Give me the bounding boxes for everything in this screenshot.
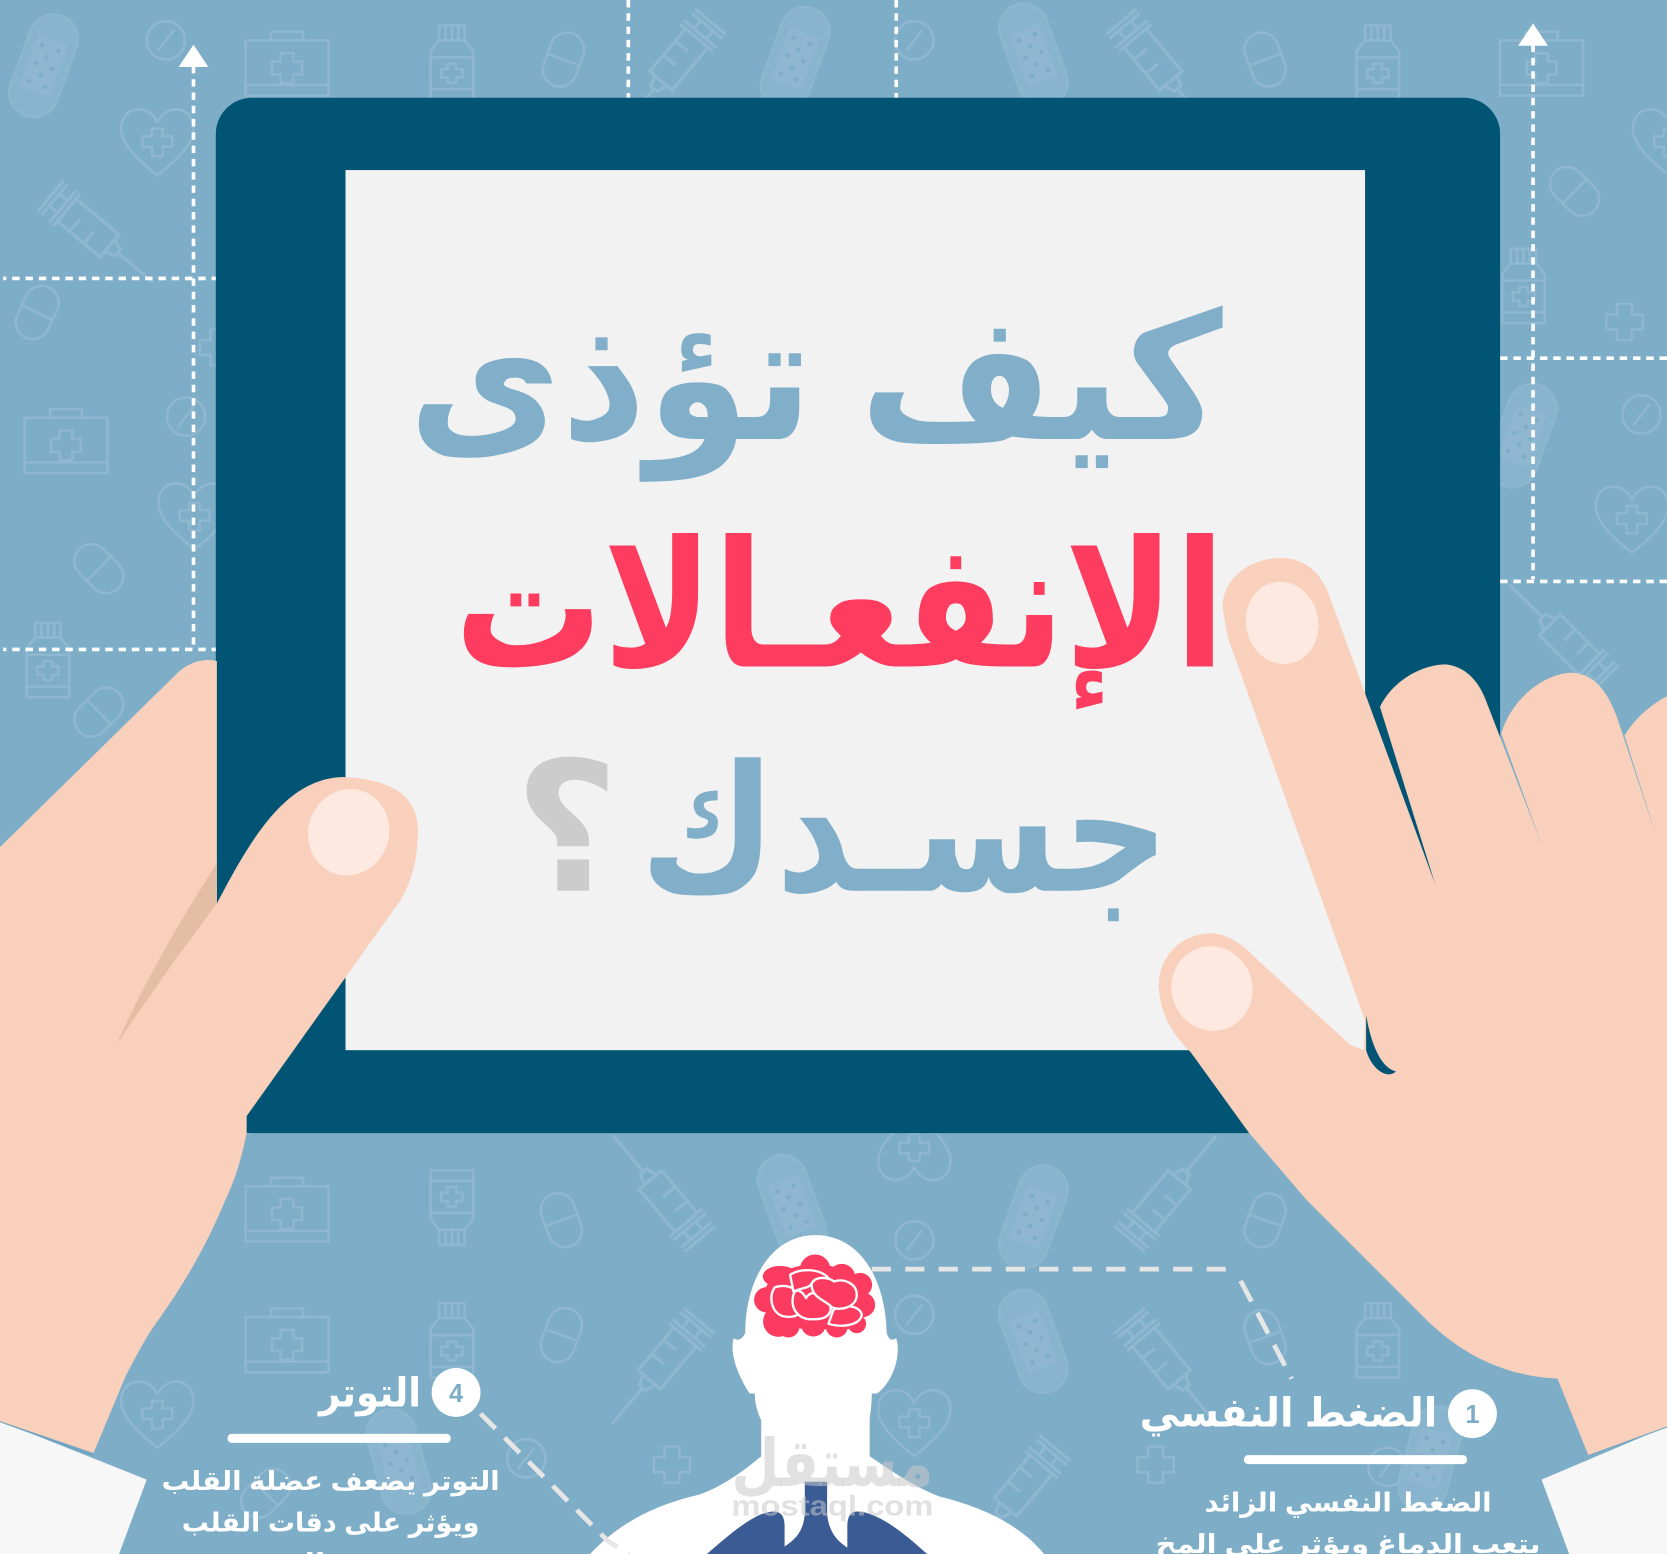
body text: الضغط النفسي الزائد	[1205, 1487, 1492, 1518]
heading: الضغط النفسي	[1140, 1389, 1437, 1436]
body text	[162, 1466, 500, 1554]
watermark: مستقل	[731, 1426, 933, 1500]
number badge 4	[432, 1368, 481, 1417]
body text: التوتر يضعف عضلة القلب	[162, 1466, 500, 1497]
thumb nail	[297, 778, 401, 886]
thumb shadow	[117, 863, 217, 1044]
title: جسـدك	[640, 733, 1169, 929]
item 4: stress	[162, 1368, 500, 1554]
divider	[1244, 1455, 1467, 1464]
dashed guide lines and arrows	[3, 0, 1667, 649]
thumb nail	[1159, 935, 1264, 1042]
lungs and trachea	[707, 1482, 927, 1554]
item 1: psychological pressure	[1140, 1389, 1540, 1554]
tablet	[216, 98, 1500, 1133]
title: كيف تؤذى	[408, 281, 1223, 483]
index finger nail	[1238, 575, 1326, 671]
connector from item 4 to body	[481, 1414, 629, 1554]
right sleeve	[1542, 1426, 1667, 1554]
human head and torso	[590, 1235, 1044, 1554]
watermark	[731, 1426, 933, 1523]
number badge 1: 1	[1465, 1401, 1480, 1429]
heading: التوتر	[317, 1369, 421, 1416]
divider	[228, 1434, 451, 1443]
body text: ويؤثر على دقات القلب	[182, 1508, 479, 1539]
watermark: mostaql.com	[731, 1491, 933, 1523]
title: الإنفعـالات	[454, 509, 1225, 710]
title: ؟	[514, 728, 619, 930]
connector from brain to item 1	[872, 1269, 1292, 1379]
title	[408, 281, 1225, 930]
brain	[754, 1254, 875, 1337]
number badge 4: 4	[449, 1380, 464, 1408]
tablet corner over hand	[1366, 1015, 1396, 1074]
right hand	[1159, 558, 1667, 1455]
body text	[1156, 1487, 1540, 1554]
tablet screen	[346, 170, 1365, 1050]
left hand	[0, 660, 418, 1453]
left sleeve	[0, 1421, 147, 1554]
number badge 1	[1448, 1389, 1497, 1438]
